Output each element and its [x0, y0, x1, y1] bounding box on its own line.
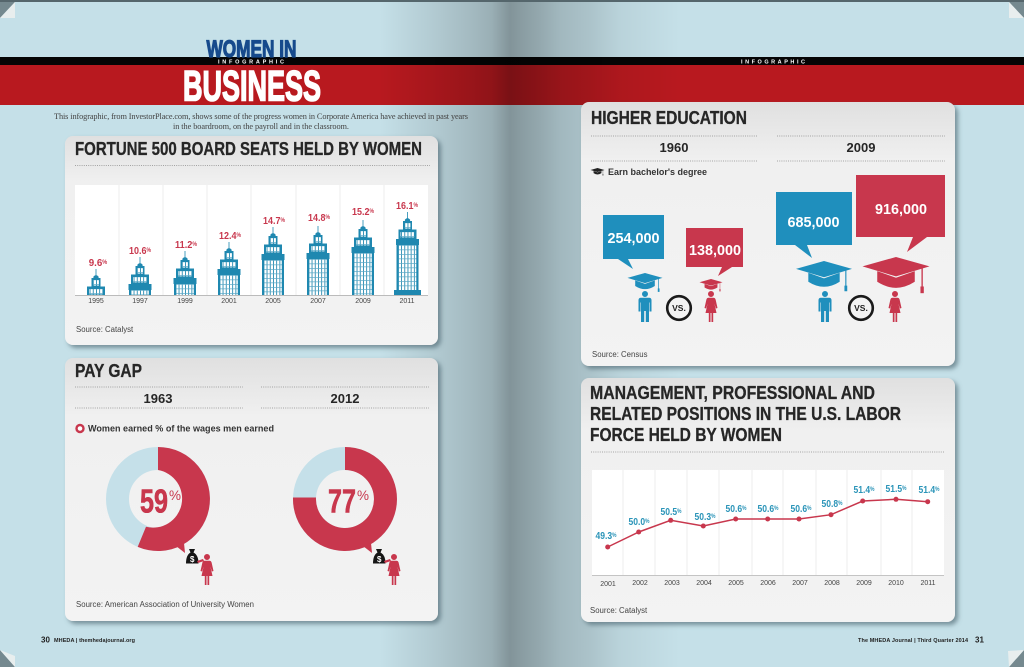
year 2012: 2012 [331, 391, 359, 406]
legend: bachelor's degree: Earn bachelor's degree [608, 167, 707, 178]
chart: line chart: 51.4 [918, 484, 939, 496]
title: Women in Business [183, 36, 321, 110]
chart: line chart: 50.0 [628, 516, 649, 528]
chart: line chart [592, 470, 944, 588]
chart: line chart: 50.6 [726, 503, 746, 515]
vs badge 2009 [849, 296, 873, 320]
chart: line chart: 2004 [696, 580, 712, 587]
header band [0, 57, 1024, 105]
chart: skyscraper bars: % [280, 218, 286, 224]
footer right [858, 636, 984, 644]
heading: Pay gap: PAY GAP [75, 361, 142, 381]
chart: line chart: 50.6 [758, 503, 778, 515]
chart: line chart: % [838, 501, 843, 507]
icon: man 2009 [818, 291, 832, 322]
chart: skyscraper bars [75, 185, 428, 303]
icon: graduation cap blue small [628, 273, 662, 292]
heading: Management: MANAGEMENT, PROFESSIONAL AND [590, 383, 875, 403]
chart: line chart: 50.5 [660, 506, 681, 518]
panel: Management positions [581, 378, 955, 622]
chart: line chart: 51.4 [854, 484, 874, 496]
chart: skyscraper bars: % [413, 203, 419, 209]
chart: skyscraper bars: 1999 [177, 298, 193, 305]
heading: Management: FORCE HELD BY WOMEN [590, 425, 782, 445]
chart: line chart: 51.5 [886, 483, 906, 495]
chart: line chart: % [935, 487, 940, 493]
chart: line chart: % [870, 487, 875, 493]
chart: line chart: % [677, 509, 682, 515]
chart: skyscraper bars: 2011 [399, 298, 415, 305]
chart: line chart: 2008 [824, 580, 840, 587]
chart: skyscraper bars: 1997 [132, 298, 148, 305]
chart: line chart: 2002 [632, 580, 648, 587]
vs badge 2009: VS. [854, 303, 868, 313]
year 1960: 1960 [660, 140, 688, 155]
chart: skyscraper bars: % [369, 209, 375, 215]
heading: Management [590, 383, 901, 445]
chart: line chart: % [711, 514, 716, 520]
vs badge 1960: VS. [672, 303, 686, 313]
icon: woman 1960 [704, 291, 718, 322]
chart: skyscraper bars: % [192, 242, 198, 248]
chart: line chart: % [902, 486, 907, 492]
chart: line chart: 2009 [856, 580, 872, 587]
chart: skyscraper bars: 2007 [310, 298, 326, 305]
donut chart: 59%: 59 [140, 482, 168, 520]
title: Women in Business: BUSINESS [183, 64, 321, 110]
chart: skyscraper bars: 16.1 [396, 200, 416, 212]
year 1963: 1963 [144, 391, 172, 406]
year 2009: 2009 [847, 140, 875, 155]
icon: money bag and woman 2012 [373, 549, 400, 585]
source: Catalyst: Source: Catalyst [590, 606, 648, 615]
icon: woman 2009 [888, 291, 902, 322]
chart: skyscraper bars: % [325, 215, 331, 221]
chart: line chart: % [742, 506, 747, 512]
chart: skyscraper bars: 12.4 [219, 230, 239, 242]
chart: line chart: % [774, 506, 779, 512]
chart: line chart: 2001 [600, 581, 616, 588]
icon: money bag and woman 1963 [186, 549, 214, 585]
chart: skyscraper bars: 2009 [355, 298, 371, 305]
panel: Fortune 500 board seats [65, 136, 444, 351]
panel: Pay gap [65, 358, 438, 621]
intro text [54, 112, 468, 131]
chart: line chart: 2003 [664, 580, 680, 587]
chart: skyscraper bars: 9.6 [89, 257, 103, 269]
chart: skyscraper bars: % [102, 260, 108, 266]
donut chart: 77%: 77 [328, 482, 356, 520]
chart: skyscraper bars: 15.2 [352, 206, 372, 218]
panel: Higher education [581, 102, 955, 366]
chart: line chart: 2006 [760, 580, 776, 587]
chart: skyscraper bars: 14.7 [263, 215, 283, 227]
chart: skyscraper bars: 11.2 [175, 239, 195, 251]
callout: women 2009 [856, 175, 945, 252]
chart: line chart: 50.6 [790, 503, 811, 515]
donut chart: 59%: % [169, 487, 181, 503]
top edge [0, 0, 1024, 2]
chart: line chart: 50.8 [822, 498, 842, 510]
icon: graduation cap red large [862, 257, 930, 293]
chart: line chart: % [807, 506, 812, 512]
icon: graduation cap blue large [796, 261, 852, 291]
chart: line chart: 49.3 [596, 530, 616, 542]
chart: line chart: % [645, 519, 650, 525]
chart: line chart: 2005 [728, 580, 744, 587]
callout: women 1960: 138,000 [689, 242, 741, 259]
chart: skyscraper bars: % [146, 248, 152, 254]
footer left: MHEDA | themhedajournal.org [54, 638, 135, 644]
chart: line chart: 2011 [920, 580, 936, 587]
intro text: This infographic, from InvestorPlace.com, shows some of the progress women in Corporate America have achieved in past years [54, 112, 468, 121]
intro text: in the boardroom, on the payroll and in the classroom. [173, 122, 349, 131]
icon: money bag and woman 2012: $ [377, 555, 382, 564]
callout: women 2009: 916,000 [875, 201, 927, 218]
donut chart: 77% [293, 447, 397, 553]
title: Women in Business: WOMEN IN [206, 36, 296, 63]
callout: men 1960: 254,000 [608, 230, 660, 247]
vs badge 1960 [667, 296, 691, 320]
chart: skyscraper bars: 1995 [88, 298, 104, 305]
chart: line chart: % [612, 533, 617, 539]
icon: man 1960 [638, 291, 652, 322]
footer left: 30 [41, 636, 50, 644]
donut chart: 77%: % [357, 487, 369, 503]
heading: Fortune 500: FORTUNE 500 BOARD SEATS HELD BY WOMEN [75, 139, 422, 159]
icon: graduation cap red small [700, 279, 722, 291]
chart: line chart: 50.3 [694, 511, 715, 523]
source: Catalyst: Source: Catalyst [76, 325, 134, 334]
footer right: 31 [975, 636, 984, 644]
title: Women in Business: INFOGRAPHIC [218, 60, 284, 66]
chart: line chart: 2010 [888, 580, 904, 587]
chart: line chart: 2007 [792, 580, 808, 587]
callout: men 1960 [603, 215, 664, 269]
callout: men 2009 [776, 192, 852, 258]
source: AAUW: Source: American Association of University Women [76, 600, 254, 609]
legend: Women earned % of the wages men earned [88, 424, 274, 434]
footer right: The MHEDA Journal | Third Quarter 2014 [858, 638, 969, 644]
chart: skyscraper bars: % [236, 233, 242, 239]
heading: Management: RELATED POSITIONS IN THE U.S. LABOR [590, 404, 901, 424]
callout: women 1960 [686, 228, 743, 276]
callout: men 2009: 685,000 [788, 214, 840, 231]
chart: skyscraper bars: 10.6 [129, 245, 149, 257]
source: Census: Source: Census [592, 350, 648, 359]
right page section tag: INFOGRAPHIC [741, 60, 805, 66]
icon: money bag and woman 1963: $ [190, 555, 195, 564]
donut chart: 59% [118, 447, 210, 553]
chart: skyscraper bars: 2001 [221, 298, 237, 305]
chart: skyscraper bars: 14.8 [308, 212, 328, 224]
chart: skyscraper bars: 2005 [265, 298, 281, 305]
heading: Higher education: HIGHER EDUCATION [591, 108, 747, 128]
footer left [41, 636, 135, 644]
